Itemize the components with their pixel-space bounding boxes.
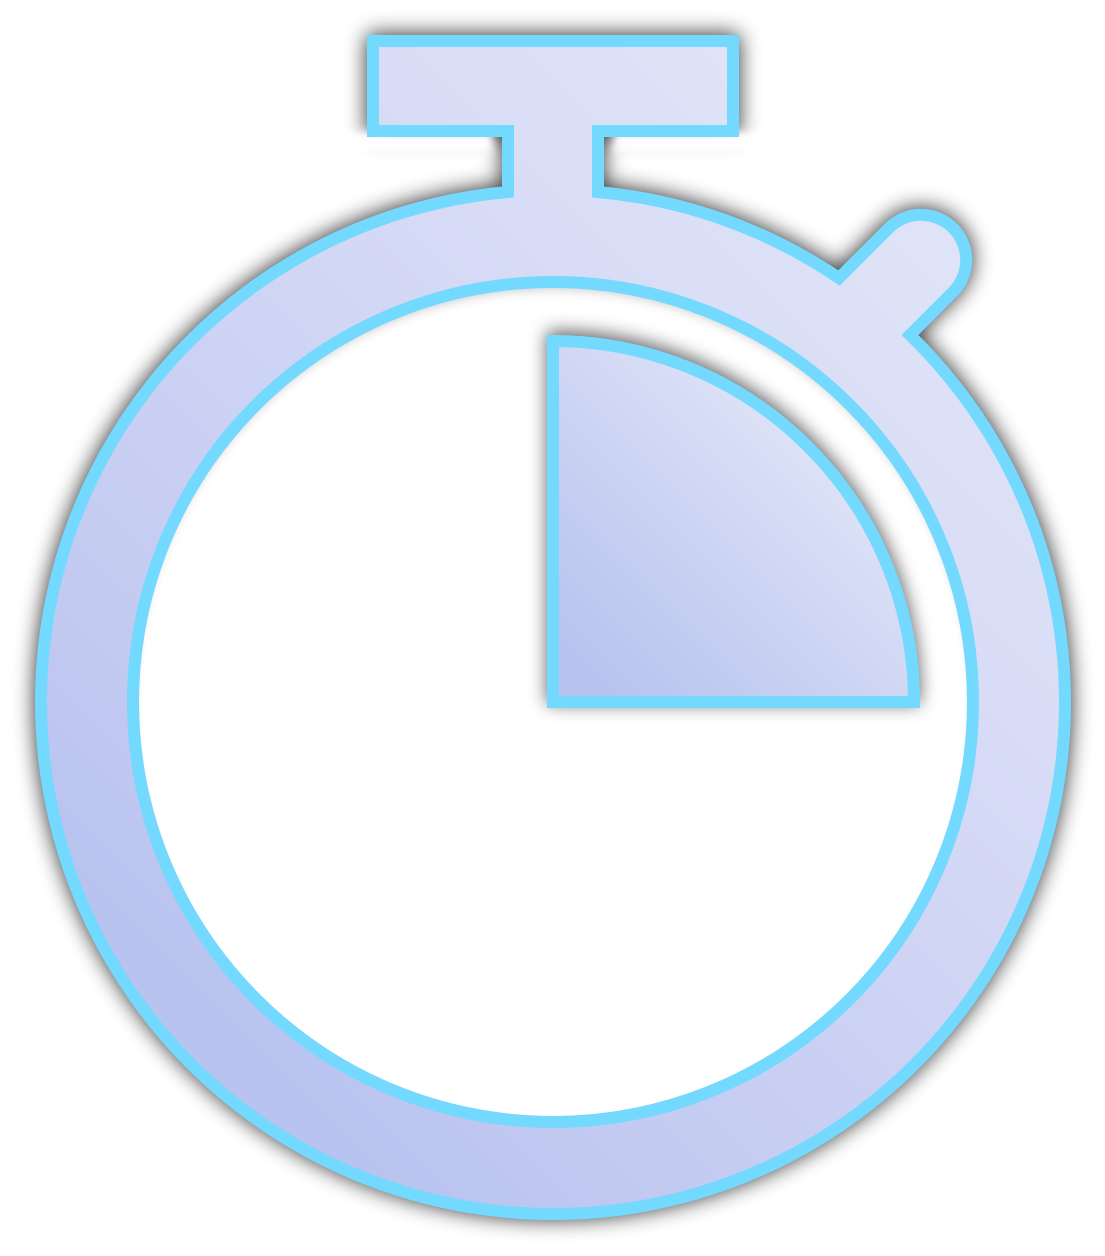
quarter-hour wedge <box>553 341 914 702</box>
